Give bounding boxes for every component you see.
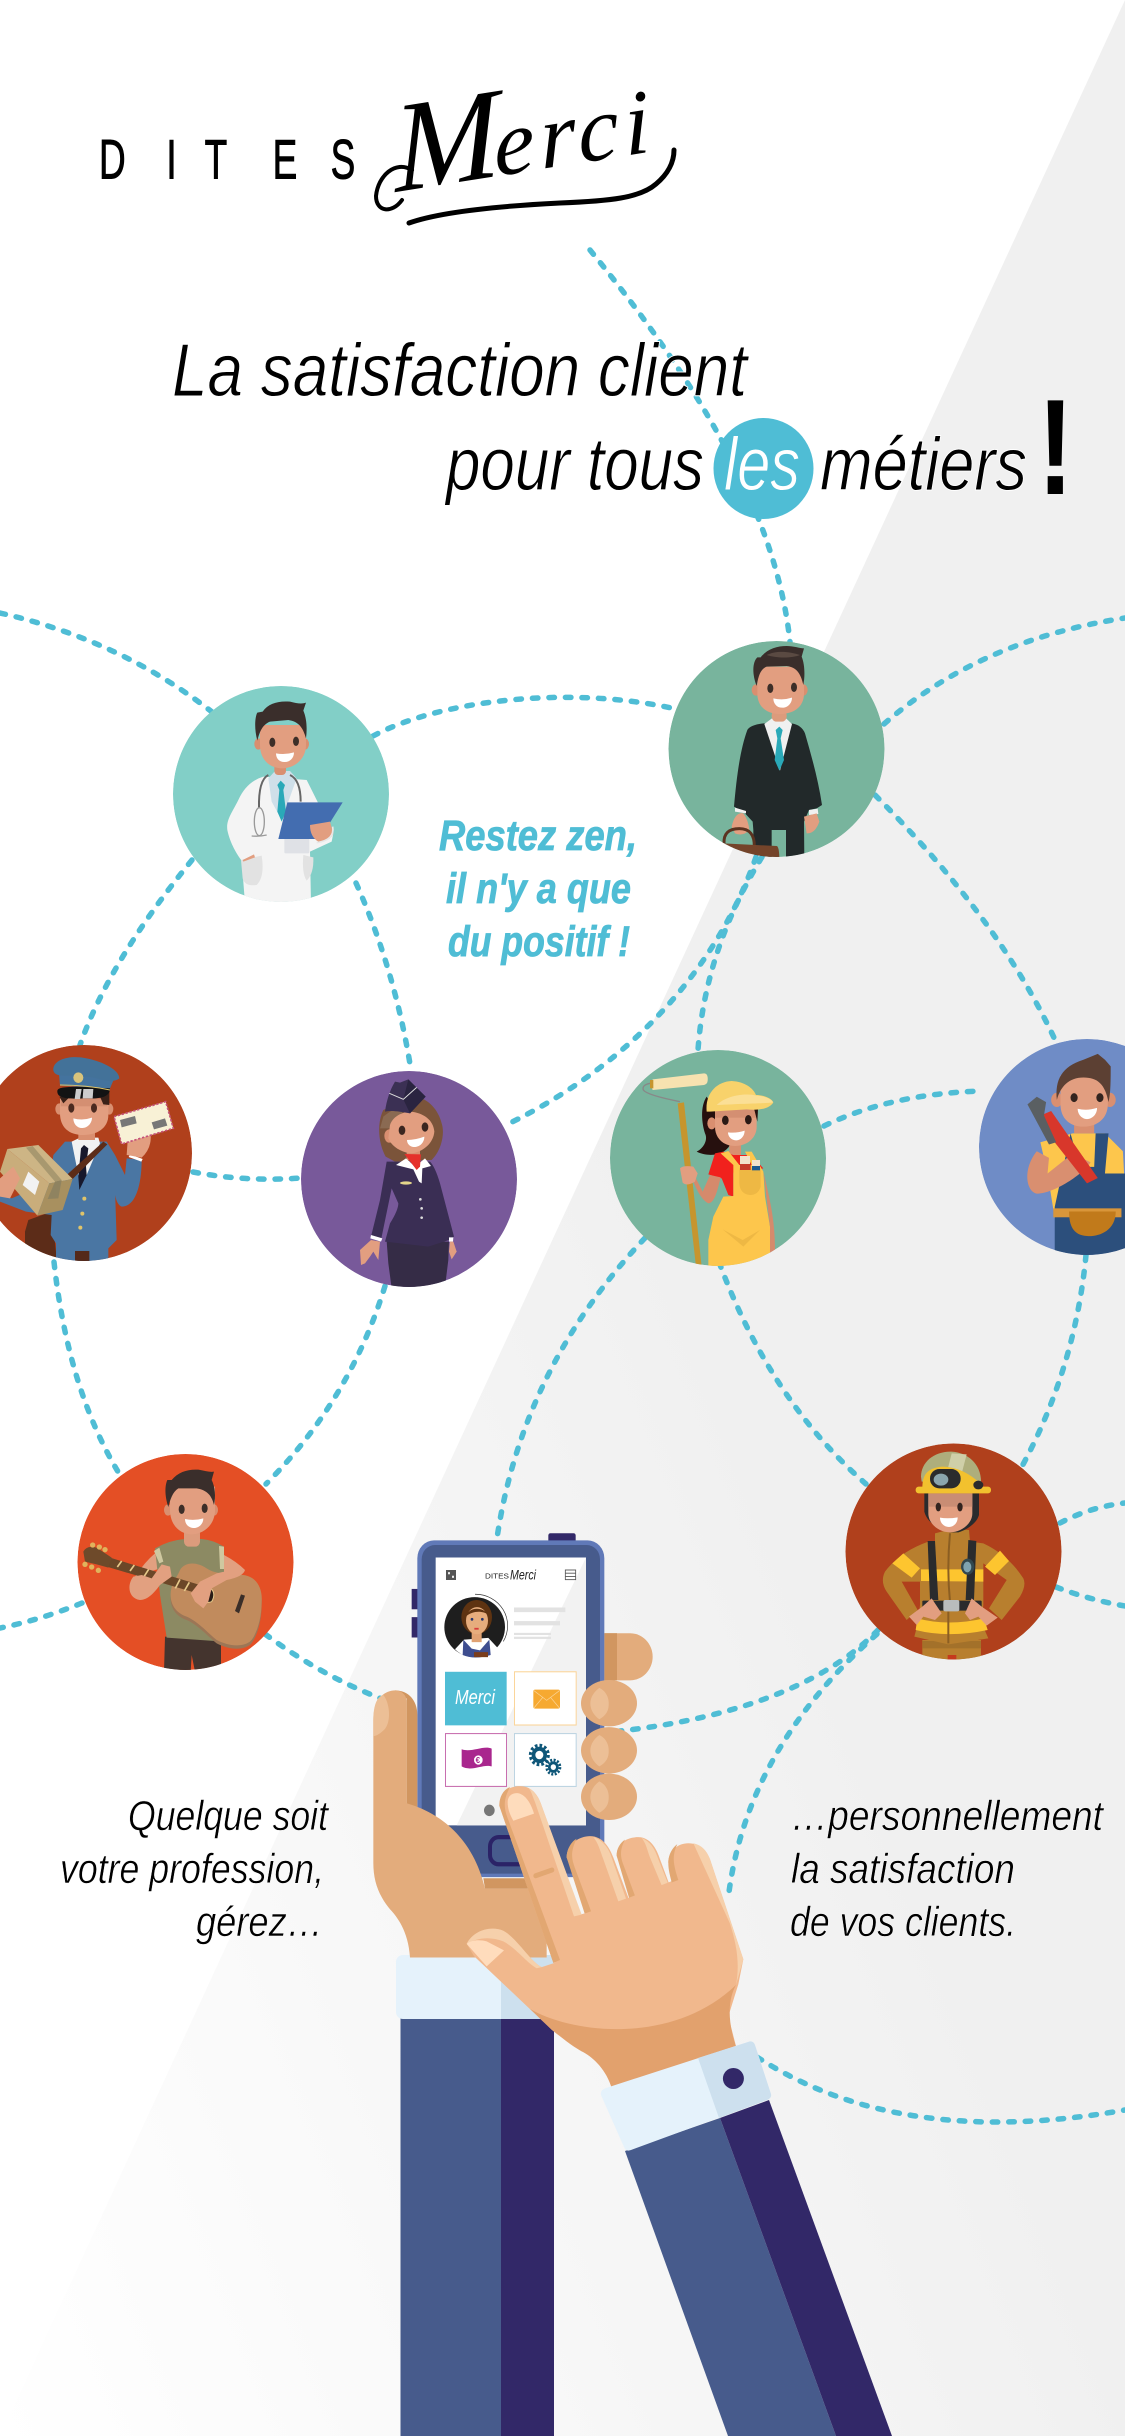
left hand fingertips	[581, 1680, 637, 1820]
right text: de vos clients.	[790, 1898, 1016, 1945]
right text	[790, 1792, 1105, 1945]
phone profile lines	[514, 1607, 565, 1639]
right text: la satisfaction	[791, 1845, 1015, 1892]
title: métiers	[820, 422, 1027, 506]
tile: settings	[514, 1734, 576, 1786]
logo: Dites Merci: Merci	[388, 37, 658, 220]
right hand	[467, 1786, 743, 2089]
circle: plumber	[979, 1039, 1125, 1256]
phone header	[446, 1567, 576, 1583]
dashed connection network	[0, 250, 1125, 2122]
phone avatar	[444, 1594, 508, 1658]
left text: gérez…	[196, 1898, 323, 1945]
phone header: DITES	[485, 1573, 509, 1581]
title: La satisfaction client	[172, 328, 750, 412]
back finger	[604, 1633, 653, 1680]
left text: Quelque soit	[128, 1792, 330, 1839]
hand and phone illustration	[373, 1533, 743, 2089]
circle: flight attendant	[301, 1071, 517, 1293]
tile: merci	[445, 1672, 507, 1725]
index finger	[499, 1786, 582, 1963]
right sleeve	[625, 2100, 892, 2436]
cuff button	[723, 2068, 744, 2089]
circle: businessman	[668, 641, 884, 860]
logo: Dites Merci: DITES	[99, 129, 355, 191]
left text: votre profession,	[60, 1845, 324, 1892]
title: !	[1038, 371, 1074, 523]
tile: money	[445, 1734, 506, 1786]
circle: painter	[610, 1050, 826, 1270]
tile: money: €	[476, 1755, 480, 1765]
slogan: Restez zen: du positif !	[448, 918, 630, 966]
slogan: Restez zen: il n'y a que	[446, 865, 631, 913]
tile: mail	[514, 1672, 576, 1725]
phone header: Merci	[510, 1567, 537, 1583]
left hand palm and thumb	[373, 1690, 547, 1957]
left text	[60, 1792, 330, 1945]
left sleeve and cuff	[396, 1955, 554, 2436]
logo: Dites Merci	[99, 37, 674, 223]
right cuff	[601, 2041, 771, 2151]
title: les	[724, 422, 800, 506]
circle: firefighter	[846, 1444, 1062, 1665]
slogan: Restez zen	[439, 812, 637, 966]
tile: merci: Merci	[455, 1686, 496, 1709]
phone	[412, 1533, 604, 1877]
circle: postman	[0, 1045, 192, 1265]
circle: guitarist	[78, 1454, 294, 1672]
slogan: Restez zen: Restez zen,	[439, 812, 637, 860]
title	[172, 328, 1074, 523]
title: pour tous	[444, 422, 704, 506]
circle: doctor	[173, 686, 389, 903]
title highlight: les	[714, 418, 814, 519]
